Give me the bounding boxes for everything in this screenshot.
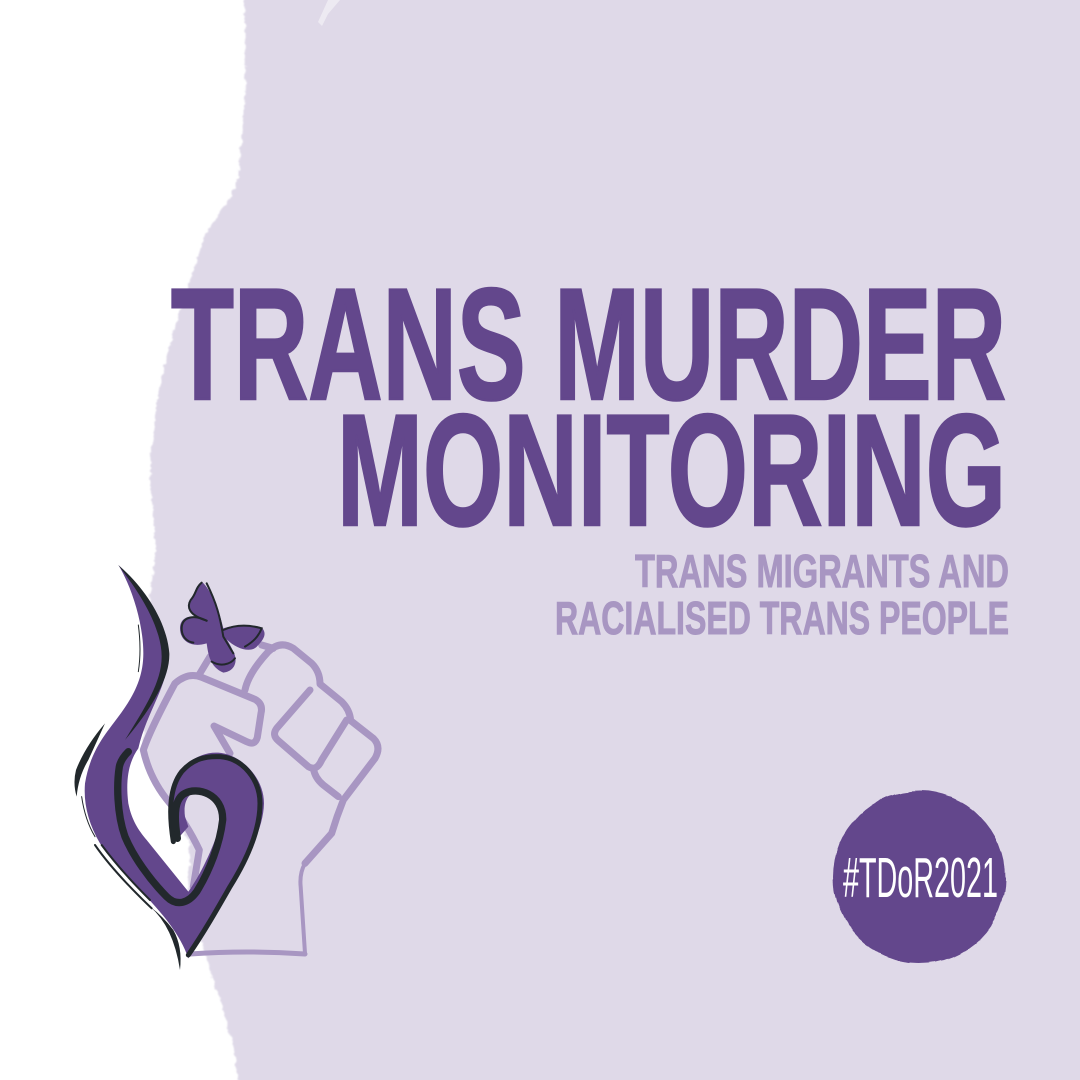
icon: flame brush strokes [74, 565, 260, 970]
subtitle [555, 545, 1009, 644]
icon: purple flame [85, 565, 264, 958]
decorative brush notch at top [318, 0, 340, 26]
icon: raised fist outline [143, 645, 378, 954]
hashtag badge [833, 791, 1005, 963]
icon: butterfly [180, 582, 265, 673]
title [171, 255, 1006, 559]
logo: fist, flame and butterfly [74, 565, 378, 970]
